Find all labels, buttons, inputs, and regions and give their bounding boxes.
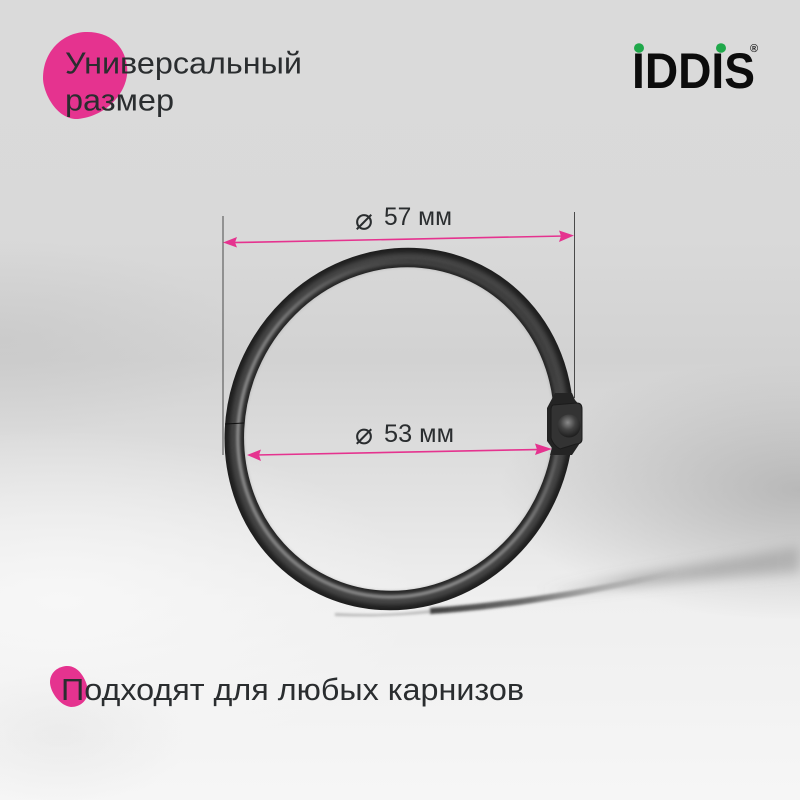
outer dimension label: 57 мм (384, 203, 452, 231)
outer dimension label (355, 202, 452, 238)
ring (225, 258, 582, 600)
clasp (547, 393, 582, 455)
heading: Универсальный (65, 46, 302, 80)
registered mark: ® (750, 43, 758, 55)
logo: IDDIS: IDDIS (632, 43, 755, 99)
inner dimension label: 53 мм (384, 420, 454, 448)
ring mid tone (228, 259, 570, 599)
ring highlight (230, 261, 568, 597)
outer dimension label: ⌀ (355, 202, 373, 238)
logo dot right (716, 43, 726, 53)
ring body (226, 258, 572, 600)
outer dimension arrow (223, 230, 574, 248)
extension line right (574, 212, 576, 398)
inner dimension arrow (247, 444, 552, 461)
inner dimension label: ⌀ (355, 417, 373, 452)
pink blob: caption (50, 666, 88, 707)
ring shadow (335, 546, 800, 616)
logo dot left (634, 43, 644, 53)
extension line left (222, 216, 224, 455)
clasp button (558, 414, 580, 438)
ring seam (225, 423, 244, 424)
caption: Подходят для любых карнизов (61, 673, 524, 707)
inner dimension label (355, 417, 454, 452)
pink blob: heading (43, 32, 127, 119)
heading: размер (65, 84, 174, 118)
